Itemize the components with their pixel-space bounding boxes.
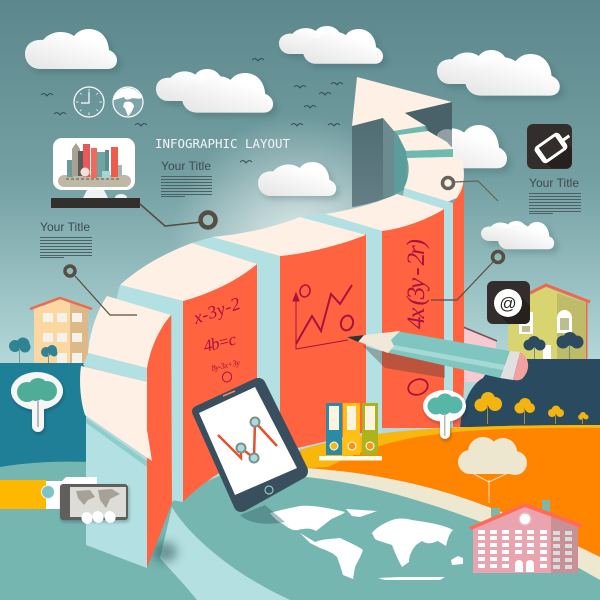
cream page 1 upper xyxy=(88,296,171,368)
fingers xyxy=(79,509,118,526)
icon: clock xyxy=(74,87,104,117)
windows xyxy=(478,530,547,568)
cloud group 7 xyxy=(481,221,554,249)
binder 3 xyxy=(362,403,378,455)
monitor base bar xyxy=(51,198,140,208)
ring connector right xyxy=(431,252,504,300)
cream top page 3 xyxy=(212,217,366,256)
your title block 3 xyxy=(529,176,581,214)
page 3 hand chart xyxy=(293,284,355,349)
band top page 2 xyxy=(116,285,183,502)
right house xyxy=(508,285,590,359)
title: infographic layout: INFOGRAPHIC LAYOUT xyxy=(155,136,290,151)
book column shapes xyxy=(80,77,464,568)
light column front xyxy=(86,420,147,568)
navy ground xyxy=(460,359,600,427)
red strip far right xyxy=(453,183,464,427)
pencil highlight xyxy=(390,345,505,370)
pencil eraser xyxy=(513,352,528,380)
pencil wood xyxy=(347,331,400,353)
arrow head xyxy=(352,77,452,131)
cloud 1 xyxy=(25,29,117,69)
cuff button xyxy=(42,486,54,498)
monitor screen xyxy=(53,138,135,190)
band page 1 xyxy=(83,353,147,382)
red page 4 xyxy=(382,209,444,428)
shaded windows xyxy=(553,531,572,569)
white cuff xyxy=(46,477,128,509)
africa and eurasia xyxy=(372,518,453,567)
your title block 2: Your Title xyxy=(40,220,90,234)
page 4 column xyxy=(444,203,453,430)
doors xyxy=(515,560,534,572)
tree sticker right xyxy=(423,390,466,439)
cream page 1 lower xyxy=(80,366,152,461)
icon: at tile: @ xyxy=(499,294,517,313)
page 2 formulas: x-3y-2 xyxy=(190,293,243,328)
pink school building xyxy=(469,500,582,573)
tablet shadow xyxy=(240,505,285,524)
world map xyxy=(270,506,463,580)
inner teal wall xyxy=(394,131,407,195)
antarctica xyxy=(378,577,445,580)
tree sticker left xyxy=(11,372,63,432)
icon: at tile xyxy=(487,281,530,324)
phone screen xyxy=(70,487,126,517)
arrow back dark xyxy=(405,102,452,147)
pencil tip xyxy=(347,335,364,342)
page 2 formulas: 8y-3x+3y xyxy=(210,357,241,373)
cream tree xyxy=(458,437,527,503)
your title block 1: Your Title xyxy=(161,159,211,173)
note mark xyxy=(221,371,233,383)
connector from monitor xyxy=(140,204,216,228)
roof xyxy=(469,503,582,530)
hand holding phone xyxy=(0,477,128,526)
left trees xyxy=(9,338,58,364)
cream road xyxy=(305,468,600,580)
teal map area xyxy=(250,477,600,600)
cloud 5 xyxy=(258,162,336,196)
left house xyxy=(30,298,92,364)
page 4 rotated formula: 4x (3y - 2r) xyxy=(403,239,430,329)
page 2 formulas xyxy=(190,293,243,383)
upper wall xyxy=(352,118,394,207)
birds xyxy=(41,59,343,163)
binders xyxy=(319,403,382,460)
australia xyxy=(451,556,463,565)
binder 2 xyxy=(343,403,360,455)
cloud group 2 xyxy=(156,69,273,113)
band under upper cream xyxy=(403,188,453,210)
page 4 note mark xyxy=(406,377,430,397)
monitor with city xyxy=(51,138,140,208)
cream top page 4 xyxy=(325,194,444,231)
teal stair 2 xyxy=(406,149,453,158)
wall light side xyxy=(383,118,394,198)
right navy trees xyxy=(524,332,584,359)
hill yellow edge xyxy=(300,425,600,468)
red page 1 xyxy=(147,315,172,568)
phone xyxy=(60,484,128,520)
binder shelf xyxy=(319,456,382,460)
city ground xyxy=(58,175,131,187)
ring connector left xyxy=(65,266,137,315)
south america xyxy=(300,533,363,579)
city buildings xyxy=(66,143,122,179)
sky glow xyxy=(0,100,600,400)
shaded wall xyxy=(551,516,578,573)
band top page 3 xyxy=(192,237,280,460)
band top page 4 xyxy=(300,214,382,440)
yellow trees xyxy=(474,392,588,424)
icon: globe xyxy=(113,87,143,117)
tablet button xyxy=(265,486,273,494)
red page 2 xyxy=(183,264,257,502)
tablet speaker xyxy=(223,391,235,396)
icon: phone tile xyxy=(527,124,575,169)
cloud behind arrow xyxy=(415,125,507,168)
teal stair 1 xyxy=(394,126,426,135)
tablet screen xyxy=(199,387,297,495)
cloud group 4 xyxy=(437,50,560,96)
tablet body xyxy=(192,378,308,512)
pencil xyxy=(347,331,528,380)
page 2 formulas: 4b=c xyxy=(201,329,238,356)
yellow sleeve xyxy=(0,480,46,509)
translucent cloud overlap xyxy=(437,129,452,147)
your title block 2 xyxy=(40,220,92,258)
cream top page 2 xyxy=(120,243,257,301)
walls xyxy=(473,507,578,573)
pencil shadow xyxy=(362,345,445,378)
your title block 3: Your Title xyxy=(529,176,579,190)
ring connector right top xyxy=(442,178,498,201)
left teal block xyxy=(0,363,88,470)
book shadow xyxy=(153,542,177,562)
monitor stand xyxy=(83,190,127,198)
pencil ferrule xyxy=(500,351,520,380)
dark band xyxy=(86,418,147,467)
round window xyxy=(519,513,531,525)
phone map xyxy=(76,489,120,508)
binder 1 xyxy=(326,403,342,455)
greenland xyxy=(346,509,377,517)
pencil body xyxy=(385,331,510,378)
small pink house xyxy=(463,327,497,382)
red page 3 xyxy=(280,234,366,452)
ground xyxy=(0,430,600,600)
light curved road xyxy=(160,507,290,600)
cream upper xyxy=(404,157,464,202)
tablet xyxy=(192,378,308,524)
chimneys xyxy=(491,500,550,518)
orange hill xyxy=(300,425,600,560)
tablet chart xyxy=(218,418,277,462)
your title block 1 xyxy=(161,159,212,196)
cloud group 3 xyxy=(279,26,383,64)
cream stair xyxy=(398,131,453,151)
north america xyxy=(270,506,345,531)
